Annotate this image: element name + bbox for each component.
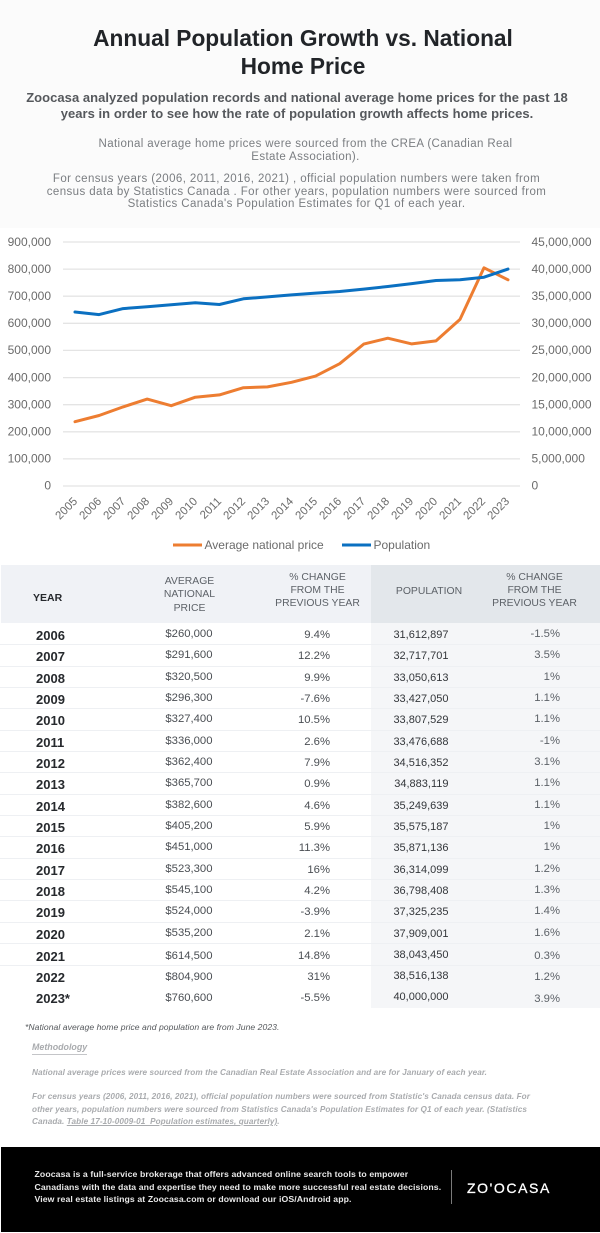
row 2006: $260,000 [165, 628, 212, 640]
x axis year labels: 2015 [294, 496, 320, 522]
row 2011: 2011 [36, 735, 64, 750]
left axis labels: 800,000 [8, 262, 51, 276]
methodology: price text: National average prices were sourced from the Canadian Real Estate Association and are for January of each year. [32, 1068, 487, 1077]
row 2013: 1.1% [534, 777, 560, 789]
row 2016: 35,871,136 [393, 842, 448, 854]
left axis labels: 600,000 [8, 316, 51, 330]
x axis year labels: 2023 [486, 496, 512, 522]
table header left background [1, 565, 370, 623]
row 2021: 0.3% [534, 950, 560, 962]
right axis labels: 30,000,000 [532, 316, 592, 330]
text block: price source [99, 138, 512, 163]
footer description: Zoocasa is a full-service brokerage that offers advanced online search tools to empower [34, 1169, 408, 1179]
row 2006: 31,612,897 [393, 629, 448, 641]
subtitle: years in order to see how the rate of population growth affects home prices. [61, 106, 533, 121]
row 2023: 3.9% [534, 992, 560, 1004]
x axis year labels: 2022 [462, 496, 488, 522]
row 2014: 2014 [36, 799, 65, 814]
row 2023: 40,000,000 [393, 991, 448, 1003]
row 2007: 32,717,701 [393, 650, 448, 662]
subtitle [26, 90, 568, 121]
row 2015 [36, 820, 560, 835]
right axis labels: 25,000,000 [532, 343, 592, 357]
row 2021: $614,500 [165, 950, 212, 962]
row 2016: 11.3% [299, 842, 330, 854]
row 2010: 10.5% [298, 714, 330, 726]
row 2022: 2022 [36, 970, 65, 985]
methodology: population text: Canada. Table 17-10-0009-01 Population estimates, quarterly). [32, 1117, 280, 1126]
row 2007: 3.5% [534, 649, 560, 661]
left axis labels [8, 235, 51, 492]
left axis labels: 100,000 [8, 452, 51, 466]
right axis labels: 40,000,000 [532, 262, 592, 276]
row 2010: 1.1% [534, 713, 560, 725]
row 2021: 2021 [36, 948, 65, 964]
row 2012 [36, 756, 560, 771]
row 2008: 1% [544, 671, 560, 683]
row 2022: 38,516,138 [393, 970, 448, 982]
row 2016: 2016 [36, 841, 65, 856]
row 2020: 2020 [36, 927, 65, 942]
row 2011 [36, 735, 560, 750]
row 2009: $296,300 [165, 692, 212, 704]
row 2012: 3.1% [534, 756, 560, 768]
left axis labels: 500,000 [8, 343, 51, 357]
x axis year labels: 2005 [54, 496, 80, 522]
row 2020: $535,200 [165, 927, 212, 939]
footer description: Canadians with the data and expertise they need to make more successful real estate decisions. [34, 1182, 441, 1192]
table header: population: POPULATION [396, 586, 462, 597]
row 2021: 38,043,450 [393, 949, 448, 961]
table header: year: YEAR [33, 592, 62, 604]
table header right background [370, 565, 600, 623]
row 2019: 1.4% [534, 905, 560, 917]
table header: population percent change: % CHANGE [506, 572, 563, 582]
text block: population source: For census years (2006, 2011, 2016, 2021) , official population numbers were taken from [53, 173, 540, 185]
text block: price source: Estate Association). [251, 151, 360, 163]
row 2014: $382,600 [165, 799, 212, 811]
logo: Zoocasa wordmark: ZO'OCASA [467, 1180, 551, 1196]
row 2015: 35,575,187 [393, 821, 448, 833]
title [93, 25, 513, 79]
row 2013: 2013 [36, 777, 65, 792]
panel: header background [0, 0, 600, 228]
x axis year labels: 2014 [270, 495, 297, 522]
row 2015: 5.9% [304, 821, 330, 833]
row 2011: 2.6% [304, 736, 330, 748]
row 2020 [36, 927, 560, 942]
row 2017: 1.2% [534, 863, 560, 875]
row 2017: $523,300 [165, 863, 212, 875]
legend: Population [374, 538, 430, 552]
row 2015: $405,200 [165, 820, 212, 832]
table header: average national price: AVERAGE [165, 576, 214, 587]
x axis year labels: 2021 [438, 496, 464, 522]
row 2007 [36, 649, 560, 664]
footnote: *National average home price and population are from June 2023. [25, 1022, 279, 1032]
x axis year labels: 2018 [366, 496, 392, 522]
text block: population source [47, 173, 546, 210]
row 2008 [36, 671, 560, 686]
row 2008: 33,050,613 [393, 672, 448, 684]
table header: average national price [164, 576, 215, 614]
row 2008: 9.9% [304, 672, 330, 684]
row 2007: 2007 [36, 649, 65, 664]
row 2015: 1% [544, 820, 560, 832]
row 2020: 37,909,001 [393, 928, 448, 940]
row 2018: 4.2% [304, 885, 330, 897]
row 2012: 2012 [36, 756, 65, 771]
x axis year labels: 2008 [126, 496, 152, 522]
x axis year labels [54, 495, 512, 522]
right axis labels: 35,000,000 [532, 289, 592, 303]
row 2010: 33,807,529 [393, 714, 448, 726]
title: Annual Population Growth vs. National [93, 25, 513, 51]
x axis year labels: 2009 [150, 496, 176, 522]
row 2012: 34,516,352 [393, 757, 448, 769]
row 2009: -7.6% [300, 693, 330, 705]
panel: data table [1, 565, 600, 1008]
left axis labels: 900,000 [8, 235, 51, 249]
table header: price percent change [275, 572, 360, 609]
row 2022: $804,900 [165, 971, 212, 983]
x axis year labels: 2020 [414, 496, 440, 522]
row 2018: 2018 [36, 884, 65, 899]
row 2023 [36, 990, 560, 1006]
row dividers [0, 644, 371, 966]
row 2023: 2023* [36, 990, 70, 1006]
legend: Average national price [204, 538, 324, 552]
table header: population percent change [492, 572, 577, 609]
right axis labels: 20,000,000 [532, 370, 592, 384]
row 2017: 36,314,099 [393, 864, 448, 876]
table header: population percent change: PREVIOUS YEAR [492, 598, 577, 609]
row 2023: $760,600 [165, 992, 212, 1004]
x axis year labels: 2006 [78, 496, 104, 522]
left axis labels: 0 [44, 478, 51, 492]
row 2013 [36, 777, 560, 792]
row 2012: $362,400 [165, 756, 212, 768]
row 2020: 1.6% [534, 927, 560, 939]
row 2008: $320,500 [165, 671, 212, 683]
row 2013: 0.9% [304, 778, 330, 790]
row 2009: 1.1% [534, 692, 560, 704]
row 2007: 12.2% [298, 650, 330, 662]
row 2011: $336,000 [165, 735, 212, 747]
row 2014 [36, 799, 560, 814]
row 2018: 1.3% [534, 884, 560, 896]
line: average national price [75, 268, 508, 422]
row 2017: 2017 [36, 863, 65, 878]
table header: price percent change: PREVIOUS YEAR [275, 598, 360, 609]
row 2022: 31% [307, 971, 330, 983]
right axis labels: 10,000,000 [532, 424, 592, 438]
line chart: price and population [8, 235, 592, 552]
row 2013: 34,883,119 [394, 778, 448, 790]
footer divider [451, 1170, 452, 1204]
table header: population percent change: FROM THE [507, 585, 562, 596]
methodology: population text: other years, population numbers were sourced from Statistics Canada's Population Estimates for Q1 of each year. (Statistics [32, 1105, 527, 1114]
methodology: population text: For census years (2006, 2011, 2016, 2021), official population numbers were sourced from Statistic's Canada census data. For [32, 1092, 530, 1101]
x axis year labels: 2007 [102, 496, 128, 522]
text block: price source: National average home prices were sourced from the CREA (Canadian Real [99, 138, 512, 150]
right axis labels [532, 235, 592, 492]
text block: population source: census data by Statistics Canada . For other years, population numbers were sourced from [47, 186, 546, 198]
row 2017: 16% [307, 864, 330, 876]
x axis year labels: 2011 [198, 496, 224, 522]
row 2019: -3.9% [300, 906, 330, 918]
subtitle: Zoocasa analyzed population records and national average home prices for the past 18 [26, 90, 568, 105]
x axis year labels: 2017 [342, 496, 368, 522]
title: Home Price [241, 53, 365, 79]
text block: population source: Statistics Canada's Population Estimates for Q1 of each year. [128, 198, 465, 210]
row 2018: 36,798,408 [393, 885, 448, 897]
row 2021 [36, 948, 560, 964]
row 2009 [36, 692, 560, 707]
footer description [34, 1169, 441, 1204]
right axis labels: 0 [532, 478, 538, 492]
row 2009: 2009 [36, 692, 65, 707]
row 2019: $524,000 [165, 905, 212, 917]
row 2010: 2010 [36, 713, 65, 728]
table header: average national price: NATIONAL [164, 589, 215, 600]
x axis year labels: 2012 [222, 496, 248, 522]
row 2018 [36, 884, 560, 899]
row 2019: 37,325,235 [393, 906, 448, 918]
row 2010: $327,400 [165, 713, 212, 725]
row 2022: 1.2% [534, 971, 560, 983]
row 2020: 2.1% [304, 928, 330, 940]
row 2008: 2008 [36, 671, 65, 686]
row 2014: 1.1% [534, 799, 560, 811]
x axis year labels: 2013 [246, 496, 272, 522]
x axis year labels: 2019 [390, 496, 416, 522]
population columns background [370, 623, 600, 1008]
left axis labels: 300,000 [8, 398, 51, 412]
row 2014: 35,249,639 [393, 800, 448, 812]
row 2018: $545,100 [165, 884, 212, 896]
methodology heading: Methodology [32, 1042, 87, 1052]
right axis labels: 5,000,000 [532, 452, 585, 466]
row 2014: 4.6% [304, 800, 330, 812]
row 2023: -5.5% [300, 992, 330, 1004]
row 2013: $365,700 [165, 777, 212, 789]
right axis labels: 45,000,000 [532, 235, 592, 249]
left axis labels: 400,000 [8, 370, 51, 384]
row 2012: 7.9% [304, 757, 330, 769]
table header: average national price: PRICE [174, 603, 205, 614]
row 2019: 2019 [36, 905, 65, 920]
left axis labels: 200,000 [8, 424, 51, 438]
row 2010 [36, 713, 560, 728]
row 2011: -1% [540, 735, 560, 747]
row 2007: $291,600 [165, 649, 212, 661]
row 2021: 14.8% [298, 950, 330, 962]
row 2006: -1.5% [530, 628, 560, 640]
row 2019 [36, 905, 560, 920]
row 2015: 2015 [36, 820, 65, 835]
methodology: population text [32, 1092, 530, 1126]
footer description: View real estate listings at Zoocasa.com or download our iOS/Android app. [34, 1194, 352, 1204]
row 2006: 2006 [36, 628, 65, 643]
table header: price percent change: % CHANGE [289, 572, 346, 583]
right axis labels: 15,000,000 [532, 398, 592, 412]
row 2009: 33,427,050 [393, 693, 448, 705]
row 2016 [36, 841, 560, 856]
panel: footer [1, 1147, 600, 1232]
legend [173, 538, 430, 552]
left axis labels: 700,000 [8, 289, 51, 303]
row 2011: 33,476,688 [393, 736, 448, 748]
row 2016: 1% [544, 841, 560, 853]
line: population [75, 269, 508, 315]
x axis year labels: 2010 [174, 496, 200, 522]
x axis year labels: 2016 [318, 496, 344, 522]
row 2016: $451,000 [165, 841, 212, 853]
row 2022 [36, 970, 560, 985]
row 2017 [36, 863, 560, 878]
row 2006: 9.4% [304, 629, 330, 641]
table header: price percent change: FROM THE [290, 585, 345, 596]
row 2006 [36, 628, 560, 643]
